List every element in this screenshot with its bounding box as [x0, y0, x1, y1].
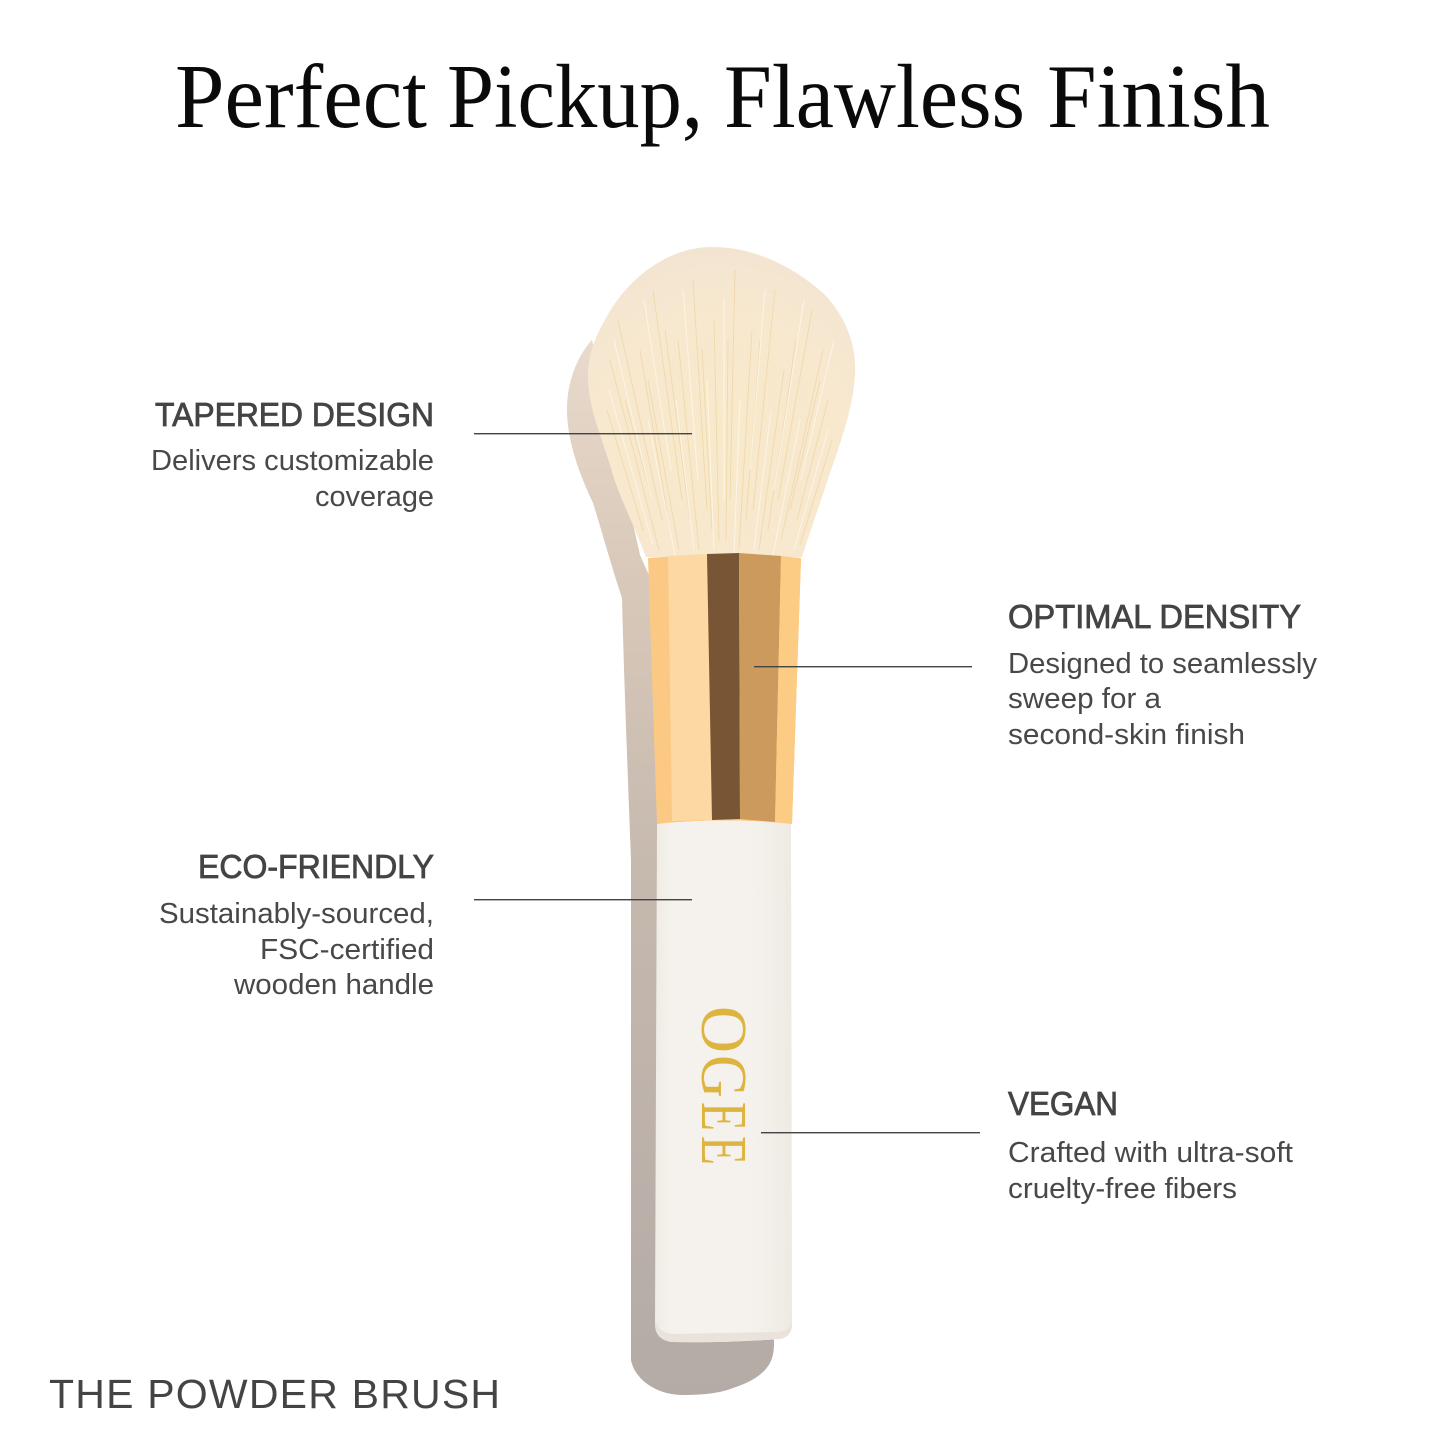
callout: optimal density	[754, 598, 1317, 751]
heading: OPTIMAL DENSITY	[1008, 598, 1301, 635]
handle logo: OGEE: O	[687, 1006, 760, 1053]
title: Pickup,	[447, 46, 703, 147]
description: Crafted with ultra-soft	[1008, 1137, 1293, 1169]
callout: optimal density: sweep for a	[1008, 683, 1162, 715]
leader line	[474, 899, 692, 900]
callout: optimal density: second-skin finish	[1008, 719, 1245, 751]
title	[175, 46, 1270, 147]
title: Finish	[1047, 46, 1270, 147]
gold ferrule	[648, 553, 801, 824]
leader line	[474, 433, 692, 434]
handle logo: OGEE: G	[687, 1055, 760, 1098]
callout: eco-friendly	[159, 848, 692, 1001]
leader line	[754, 666, 972, 667]
handle logo: OGEE: E	[687, 1136, 760, 1165]
description: Sustainably-sourced,	[159, 898, 434, 930]
heading: TAPERED DESIGN	[155, 396, 434, 433]
callout: eco-friendly: wooden handle	[233, 969, 434, 1001]
title: Perfect	[175, 46, 427, 147]
heading: ECO-FRIENDLY	[198, 848, 434, 885]
heading: VEGAN	[1008, 1085, 1118, 1122]
brush cast shadow	[567, 340, 774, 1395]
handle logo: OGEE	[687, 1006, 760, 1165]
callout: eco-friendly: FSC-certified	[260, 934, 434, 966]
callout: vegan	[761, 1085, 1293, 1205]
handle logo: OGEE: E	[687, 1102, 760, 1131]
description: Designed to seamlessly	[1008, 648, 1317, 680]
description: Delivers customizable	[151, 445, 434, 477]
title: Flawless	[724, 46, 1025, 147]
white wooden handle	[655, 820, 792, 1342]
product name: THE POWDER BRUSH	[49, 1371, 500, 1417]
brush illustration	[567, 247, 855, 1395]
leader line	[761, 1132, 980, 1133]
callout: tapered design	[151, 396, 692, 513]
callout: vegan: cruelty-free fibers	[1008, 1173, 1237, 1205]
bristles	[588, 247, 855, 558]
callout: tapered design: coverage	[315, 481, 434, 513]
